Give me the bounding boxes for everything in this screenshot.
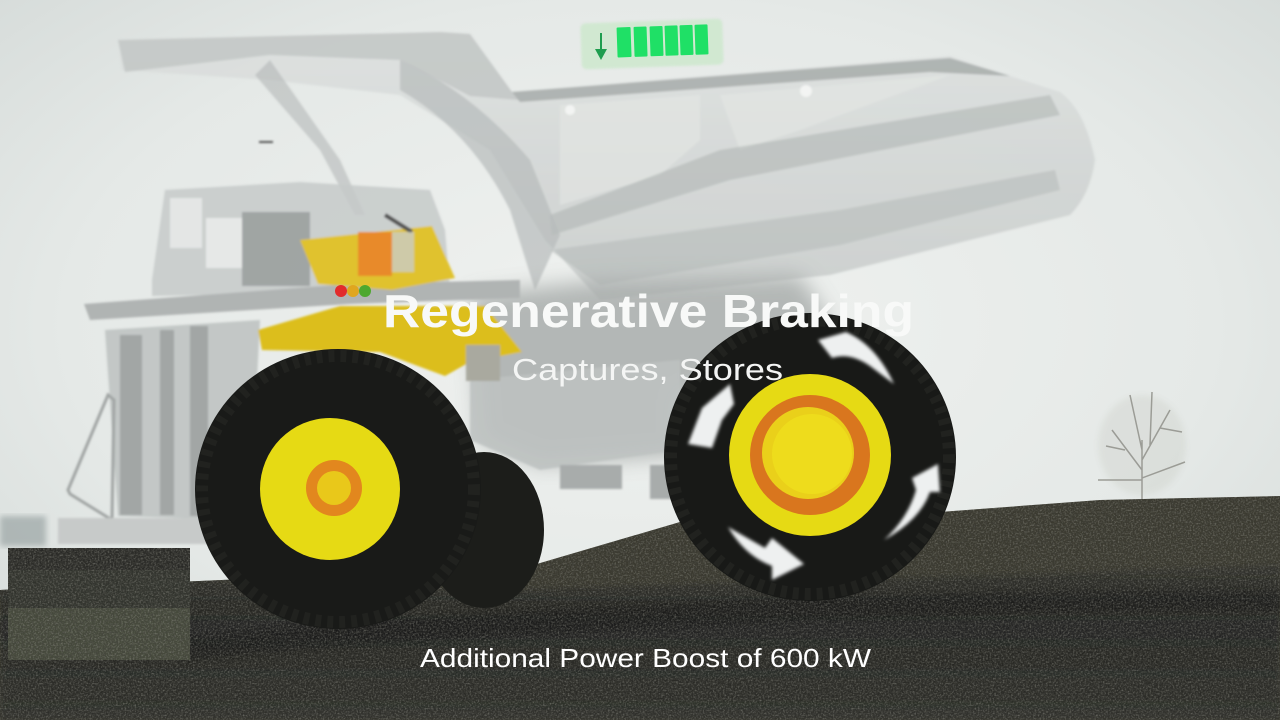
- caption: Additional Power Boost of 600 kW: [420, 643, 872, 673]
- background tree: [1098, 392, 1186, 500]
- ground: embankment and gravel: [0, 490, 1280, 720]
- distant haze lower left: [0, 516, 46, 546]
- truck: translucent body: [58, 32, 1095, 544]
- indicator lights: [335, 285, 371, 297]
- engine: yellow and orange components: [258, 215, 522, 381]
- inset patch lower left: [8, 548, 190, 660]
- hub: [260, 418, 400, 560]
- wheel: right tire: [664, 313, 956, 601]
- chassis and front frame: [58, 280, 680, 544]
- wheel: left tire: [195, 349, 481, 629]
- hub: [729, 374, 891, 536]
- hull mass behind text: [470, 275, 830, 465]
- dump bed: [118, 32, 1095, 300]
- rotation arrows: [688, 332, 940, 580]
- battery icon: charging: [580, 19, 724, 69]
- heading: Regenerative Braking: [383, 285, 914, 337]
- cab: [152, 182, 450, 296]
- rear wheel inner dual tire: [424, 452, 544, 608]
- subheading: Captures, Stores: [512, 352, 783, 387]
